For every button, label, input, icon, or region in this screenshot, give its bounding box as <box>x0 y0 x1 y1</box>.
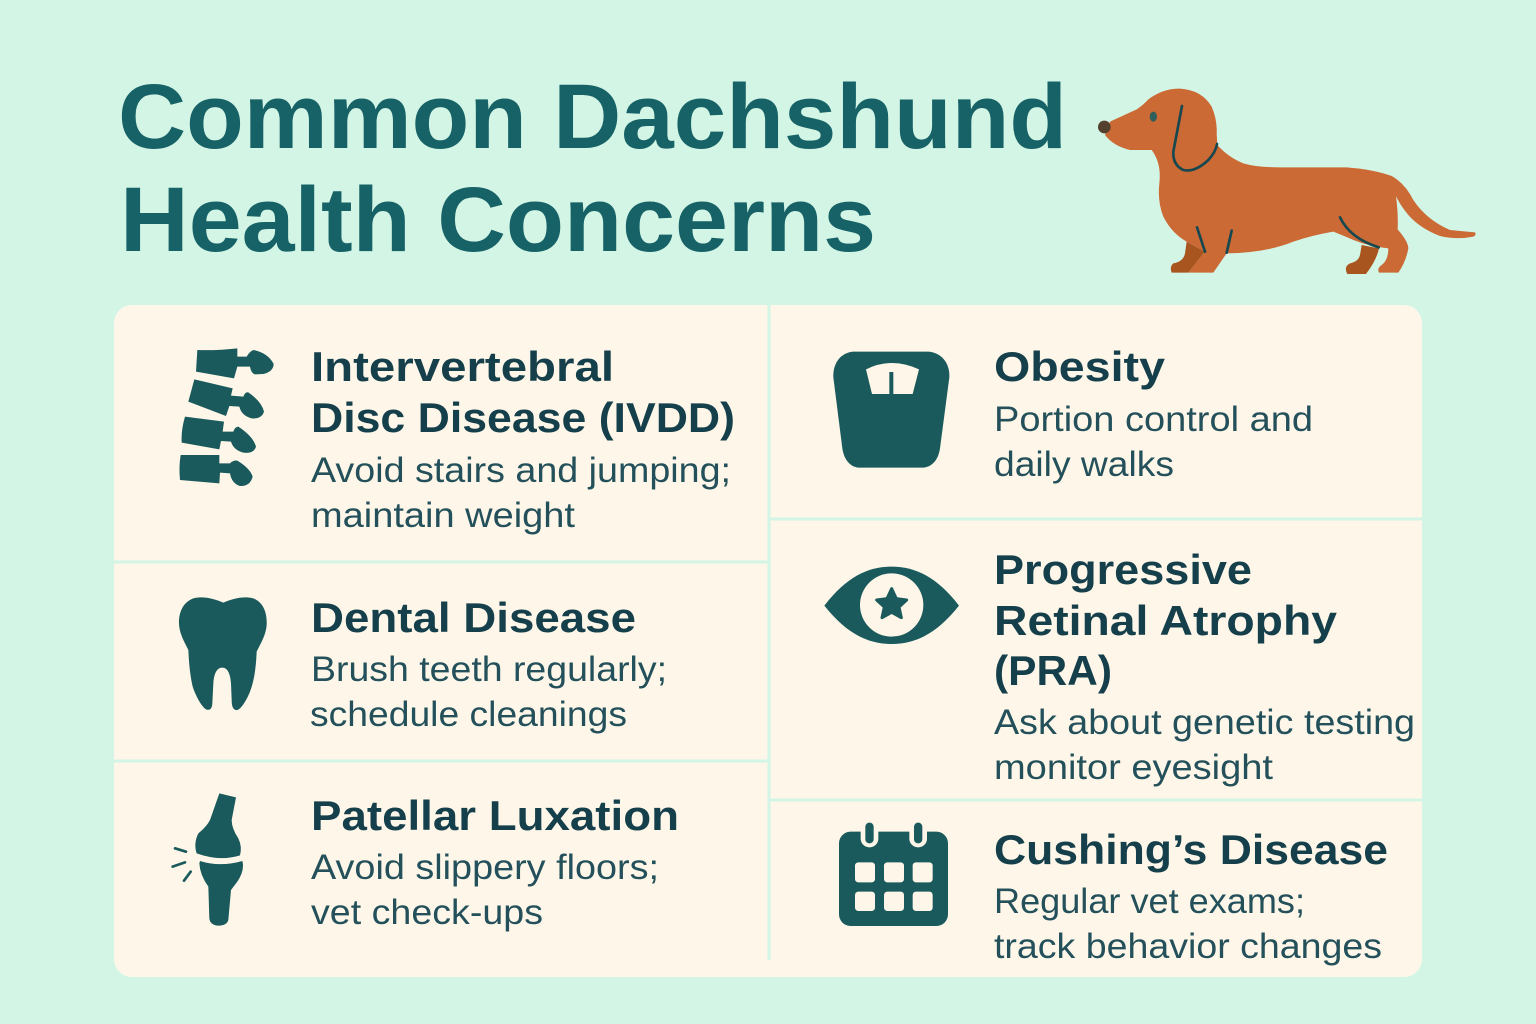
text: IVDD advice: maintain weight <box>311 496 575 535</box>
heading: cushing's disease: Cushing’s Disease <box>994 826 1388 873</box>
row: obesity <box>833 343 1313 484</box>
row: progressive retinal atrophy <box>824 546 1415 787</box>
text: dental advice: Brush teeth regularly; <box>311 650 667 689</box>
title <box>118 66 1067 271</box>
row: IVDD <box>179 343 735 535</box>
heading: PRA: Progressive <box>994 546 1252 593</box>
row: patellar luxation <box>173 792 679 932</box>
text: cushing's advice: Regular vet exams; <box>994 882 1305 921</box>
heading: PRA: Retinal Atrophy <box>994 597 1338 644</box>
text: obesity advice <box>994 400 1313 484</box>
heading: IVDD <box>311 343 735 441</box>
panel: health concerns card <box>114 305 1422 977</box>
text: patellar advice: vet check-ups <box>311 893 543 932</box>
text: PRA advice: Ask about genetic testing <box>994 703 1415 742</box>
icon: weighing scale <box>833 352 949 468</box>
row: cushing's disease <box>839 823 1388 966</box>
text: obesity advice: Portion control and <box>994 400 1313 439</box>
heading: dental disease: Dental Disease <box>311 594 636 641</box>
icon: tooth <box>179 597 267 710</box>
heading: IVDD: Intervertebral <box>311 343 614 390</box>
icon: eye with star <box>824 567 959 644</box>
icon: calendar <box>839 823 948 926</box>
text: IVDD advice: Avoid stairs and jumping; <box>311 451 731 490</box>
title: Health Concerns <box>120 169 876 271</box>
text: patellar advice: Avoid slippery floors; <box>311 848 659 887</box>
text: cushing's advice <box>994 882 1382 966</box>
row: dental disease <box>179 594 667 734</box>
icon: dachshund illustration <box>1098 89 1476 274</box>
heading: patellar luxation: Patellar Luxation <box>311 792 679 839</box>
icon: spine <box>179 348 274 486</box>
heading: PRA: (PRA) <box>994 647 1112 694</box>
text: dental advice: schedule cleanings <box>310 695 627 734</box>
text: PRA advice: monitor eyesight <box>994 748 1273 787</box>
text: obesity advice: daily walks <box>994 445 1174 484</box>
text: IVDD advice <box>311 451 731 535</box>
title: Common Dachshund <box>118 66 1067 168</box>
text: cushing's advice: track behavior changes <box>994 927 1382 966</box>
text: PRA advice <box>994 703 1415 787</box>
heading: IVDD: Disc Disease (IVDD) <box>311 394 735 441</box>
icon: knee joint <box>173 793 243 926</box>
text: dental advice <box>310 650 667 734</box>
heading: PRA <box>994 546 1338 694</box>
heading: obesity: Obesity <box>994 343 1166 390</box>
text: patellar advice <box>311 848 659 932</box>
